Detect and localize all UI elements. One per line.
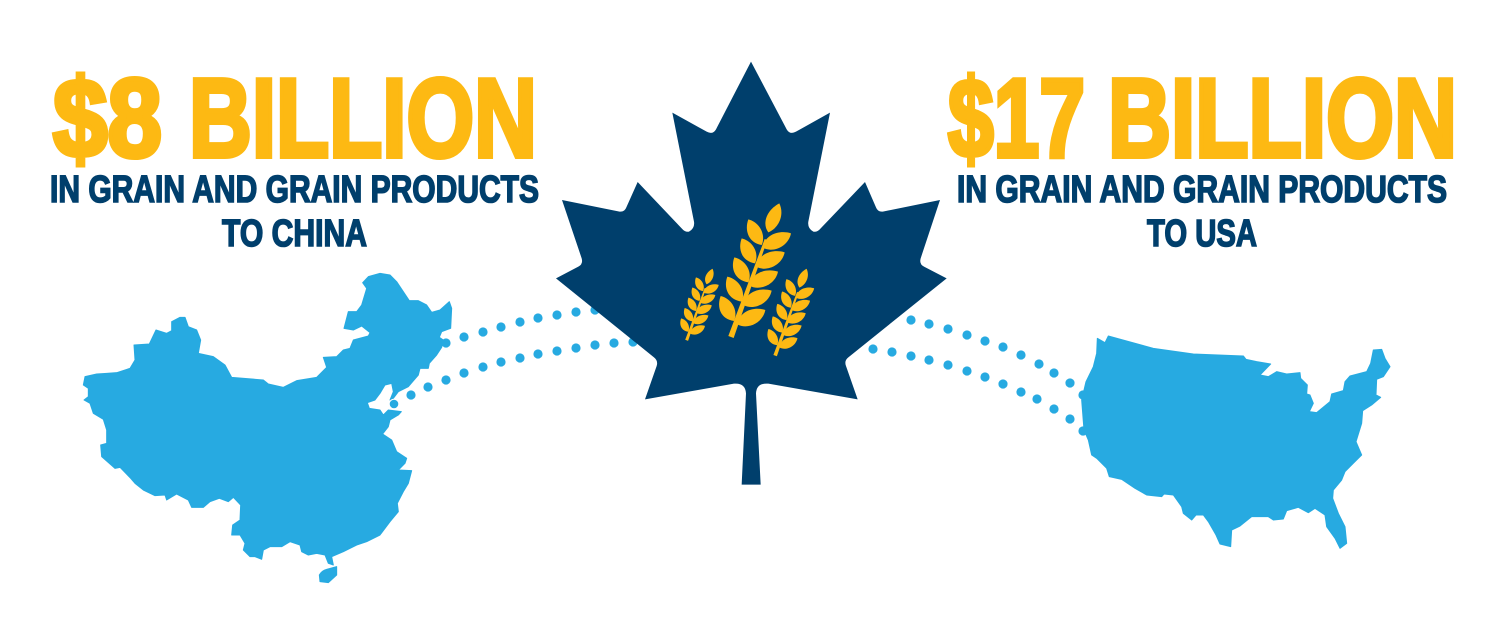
map: China — [83, 273, 452, 583]
icon: maple leaf — [556, 62, 947, 485]
left headline: $8 billion: BILLION — [189, 56, 537, 180]
left subheading: grain and grain products to China: IN GRAIN AND GRAIN PRODUCTS — [50, 169, 539, 211]
dotted trade routes: Canada to China — [389, 305, 638, 409]
right subheading: grain and grain products to USA — [957, 169, 1447, 255]
left headline: $8 billion: $8 — [53, 56, 162, 180]
right subheading: grain and grain products to USA: TO USA — [1147, 213, 1257, 255]
dotted trade routes: Canada to USA — [868, 315, 1088, 436]
left subheading: grain and grain products to China — [50, 169, 539, 255]
icon: wheat stalks — [680, 203, 814, 356]
map: USA — [1082, 336, 1390, 548]
left subheading: grain and grain products to China: TO CHINA — [222, 213, 367, 255]
left headline: $8 billion — [53, 56, 537, 180]
right headline: $17 billion — [948, 56, 1457, 180]
right headline: $17 billion: $17 — [948, 56, 1085, 180]
